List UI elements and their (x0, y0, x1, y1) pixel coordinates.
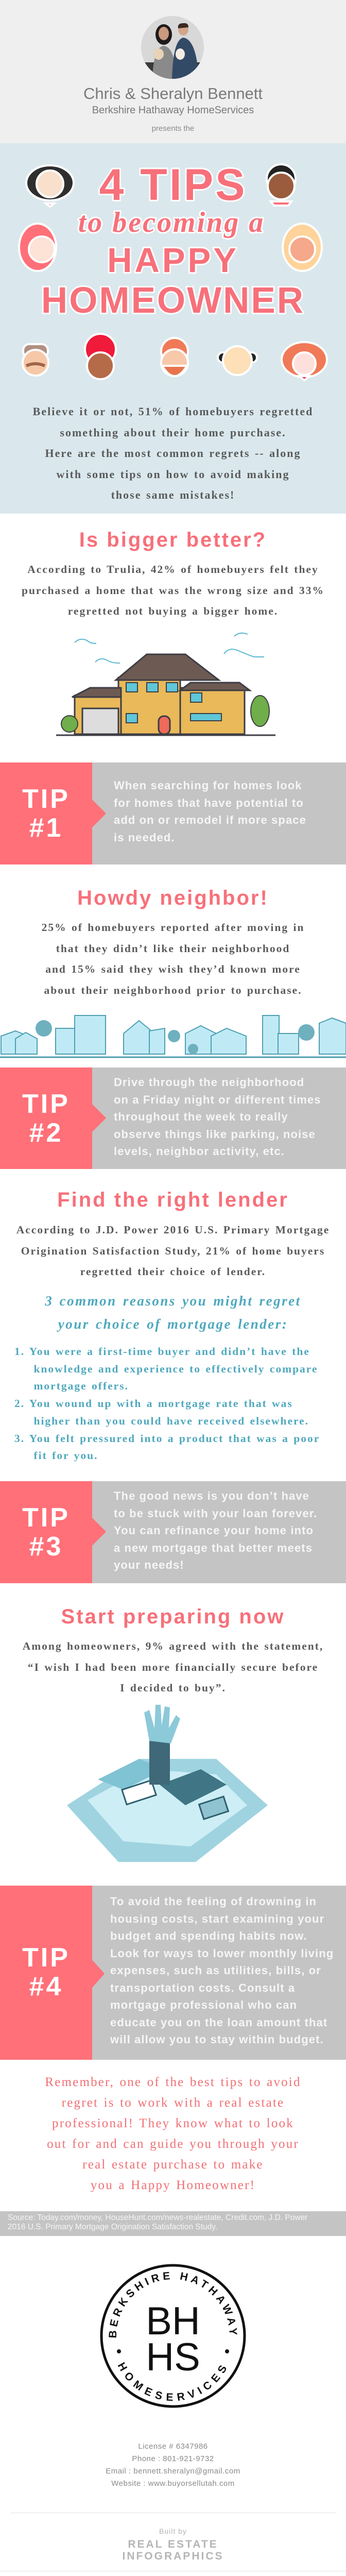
tip text: The good news is you don’t have (114, 1489, 309, 1502)
heading: Is bigger better?: Is bigger better? (79, 529, 267, 551)
contact info: License # 6347986 (138, 2442, 208, 2451)
title text (41, 160, 305, 321)
company name: Berkshire Hathaway HomeServices (92, 105, 254, 116)
tip label: #3 (29, 1532, 63, 1562)
tip label: TIP (22, 1943, 70, 1973)
arrow (92, 1104, 106, 1132)
tip text: transportation costs. Consult a (110, 1981, 295, 1994)
tip text: on a Friday night or different times (114, 1093, 321, 1106)
list: reasons (14, 1345, 320, 1462)
tip text: is needed. (114, 831, 175, 844)
presents the: presents the (152, 124, 194, 133)
logo: BHHS (100, 2264, 246, 2408)
text: neighborhood stat: that they didn’t like their neighborhood (56, 942, 290, 954)
credit: built by: Built by (159, 2527, 187, 2535)
arrow (92, 1518, 106, 1546)
closing message: professional! They know what to look (52, 2116, 294, 2130)
text: trulia stat: purchased a home that was the wrong size and 33% (22, 584, 324, 597)
text: trulia stat: regretted not buying a bigger home. (68, 605, 278, 617)
tip text: a new mortgage that better meets (114, 1541, 313, 1554)
closing message: you a Happy Homeowner! (91, 2178, 255, 2192)
illustration: neighborhood (0, 1015, 346, 1058)
tip text: Drive through the neighborhood (114, 1076, 304, 1089)
logo: BHHS: HOMESERVICES (117, 2362, 227, 2401)
tip text: Look for ways to lower monthly living (110, 1946, 334, 1960)
tip label (22, 1943, 70, 2002)
tip #3 band (0, 1481, 346, 1583)
arrow (92, 1960, 105, 1988)
sources band: 2016 U.S. Primary Mortgage Origination Satisfaction Study. (8, 2223, 217, 2231)
heading: Howdy neighbor: Howdy neighbor! (77, 887, 269, 909)
tip text (114, 1489, 317, 1571)
tip text: mortgage professional who can (110, 1998, 297, 2011)
title text: to becoming a (78, 207, 265, 239)
list: reasons: fit for you. (34, 1449, 98, 1462)
tip label: #2 (29, 1118, 63, 1148)
title text: HOMEOWNER (41, 280, 305, 321)
text: financial secure stat: Among homeowners, 9% agreed with the statement, (23, 1640, 323, 1652)
subheading: 3 common reasons: 3 common reasons you might regret (45, 1293, 301, 1309)
tip text: add on or remodel if more space (114, 814, 306, 826)
subheading: 3 common reasons: your choice of mortgage lender: (58, 1316, 288, 1332)
text: financial secure stat: I decided to buy”. (120, 1682, 226, 1694)
intro text: Believe it or not, 51% of homebuyers regretted (33, 405, 313, 418)
intro text (33, 405, 313, 501)
tip text: budget and spending habits now. (110, 1929, 307, 1942)
tip #1 band (0, 762, 346, 865)
tip #4 band (0, 1886, 346, 2060)
illustration: hand among papers (67, 1705, 268, 1862)
tip text (110, 1895, 334, 2046)
tip text: expenses, such as utilities, bills, or (110, 1964, 321, 1977)
text: JD Power stat: Origination Satisfaction Study, 21% of home buyers (21, 1245, 325, 1257)
tip text (114, 779, 306, 844)
tip label: TIP (22, 784, 70, 814)
contact info: Email : bennett.sheralyn@gmail.com (106, 2467, 240, 2476)
title text: HAPPY (107, 241, 239, 280)
list: reasons: 3. You felt pressured into a product that was a poor (14, 1432, 320, 1445)
tip text (114, 1076, 321, 1158)
text: JD Power stat: According to J.D. Power 2016 U.S. Primary Mortgage (16, 1224, 330, 1236)
tip label: #4 (29, 1972, 63, 2002)
text: JD Power stat: regretted their choice of lender. (80, 1265, 266, 1278)
tip label (22, 1503, 70, 1562)
agent name: Chris & Sheralyn Bennett (83, 84, 263, 103)
closing message: out for and can guide you through your (47, 2137, 299, 2151)
intro text: with some tips on how to avoid making (57, 468, 289, 480)
contact info: Phone : 801-921-9732 (132, 2454, 214, 2463)
intro text: something about their home purchase. (60, 426, 286, 439)
tip text: for homes that have potential to (114, 796, 304, 809)
header panel (0, 0, 346, 143)
tip label (22, 784, 70, 843)
text: neighborhood stat: about their neighborhood prior to purchase. (44, 984, 302, 996)
list: reasons: mortgage offers. (34, 1380, 129, 1392)
tip text: You can refinance your home into (114, 1524, 314, 1537)
tip #2 band (0, 1067, 346, 1169)
text: financial secure stat: “I wish I had been more financially secure before (28, 1661, 318, 1673)
tip text: observe things like parking, noise (114, 1128, 316, 1141)
text: trulia stat (22, 563, 324, 617)
tip text: your needs! (114, 1558, 184, 1571)
text: trulia stat: According to Trulia, 42% of homebuyers felt they (27, 563, 319, 575)
intro text: those same mistakes! (111, 488, 235, 501)
illustration: house (56, 633, 275, 736)
text: financial secure stat (23, 1640, 323, 1694)
subheading: 3 common reasons (45, 1293, 301, 1332)
tip text: levels, neighbor activity, etc. (114, 1145, 285, 1158)
closing message: real estate purchase to make (82, 2158, 264, 2172)
text: neighborhood stat (42, 921, 304, 996)
tip text: educate you on the loan amount that (110, 2015, 327, 2029)
tip label (22, 1089, 70, 1148)
arrow (92, 800, 106, 827)
logo: BHHS: BH (146, 2299, 200, 2343)
credit: real estate infographics: REAL ESTATE (128, 2538, 218, 2550)
tip text: To avoid the feeling of drowning in (110, 1895, 317, 1908)
tip text: When searching for homes look (114, 779, 302, 792)
list: reasons: 2. You wound up with a mortgage rate that was (14, 1397, 293, 1410)
faces illustration (18, 163, 328, 381)
photo: agents (141, 16, 204, 79)
tip text: housing costs, start examining your (110, 1912, 324, 1925)
logo: BHHS: BERKSHIRE HATHAWAY (109, 2272, 237, 2338)
logo: BHHS: HS (146, 2335, 200, 2379)
contact info (106, 2442, 240, 2488)
list: reasons: 1. You were a first-time buyer and didn’t have the (14, 1345, 310, 1358)
tip label: TIP (22, 1089, 70, 1119)
sources band: Source: Today.com/money, HouseHunt.com/news-realestate, Credit.com, J.D. Power (8, 2213, 307, 2222)
heading: Start preparing now: Start preparing now (61, 1605, 285, 1628)
tip label: TIP (22, 1503, 70, 1533)
title text: 4 TIPS (99, 160, 247, 210)
tip text: will allow you to stay within budget. (110, 2033, 324, 2046)
tip text: throughout the week to really (114, 1110, 288, 1123)
intro text: Here are the most common regrets -- along (45, 447, 301, 460)
list: reasons: knowledge and experience to effectively compare (34, 1363, 318, 1375)
text: neighborhood stat: and 15% said they wish they’d known more (45, 963, 301, 975)
credit: real estate infographics: INFOGRAPHICS (122, 2550, 223, 2562)
credit: real estate infographics (122, 2538, 223, 2562)
tip label: #1 (29, 813, 63, 843)
text: JD Power stat (16, 1224, 330, 1278)
tip text: to be stuck with your loan forever. (114, 1507, 317, 1520)
closing message: Remember, one of the best tips to avoid (45, 2075, 301, 2089)
closing message: regret is to work with a real estate (62, 2096, 284, 2110)
list: reasons: higher than you could have received elsewhere. (34, 1415, 309, 1427)
sources band (0, 2211, 346, 2236)
title panel (0, 143, 346, 514)
heading: Find the right lender: Find the right lender (57, 1189, 289, 1211)
text: neighborhood stat: 25% of homebuyers reported after moving in (42, 921, 304, 934)
closing message (45, 2075, 301, 2192)
contact info: Website : www.buyorsellutah.com (111, 2479, 235, 2488)
